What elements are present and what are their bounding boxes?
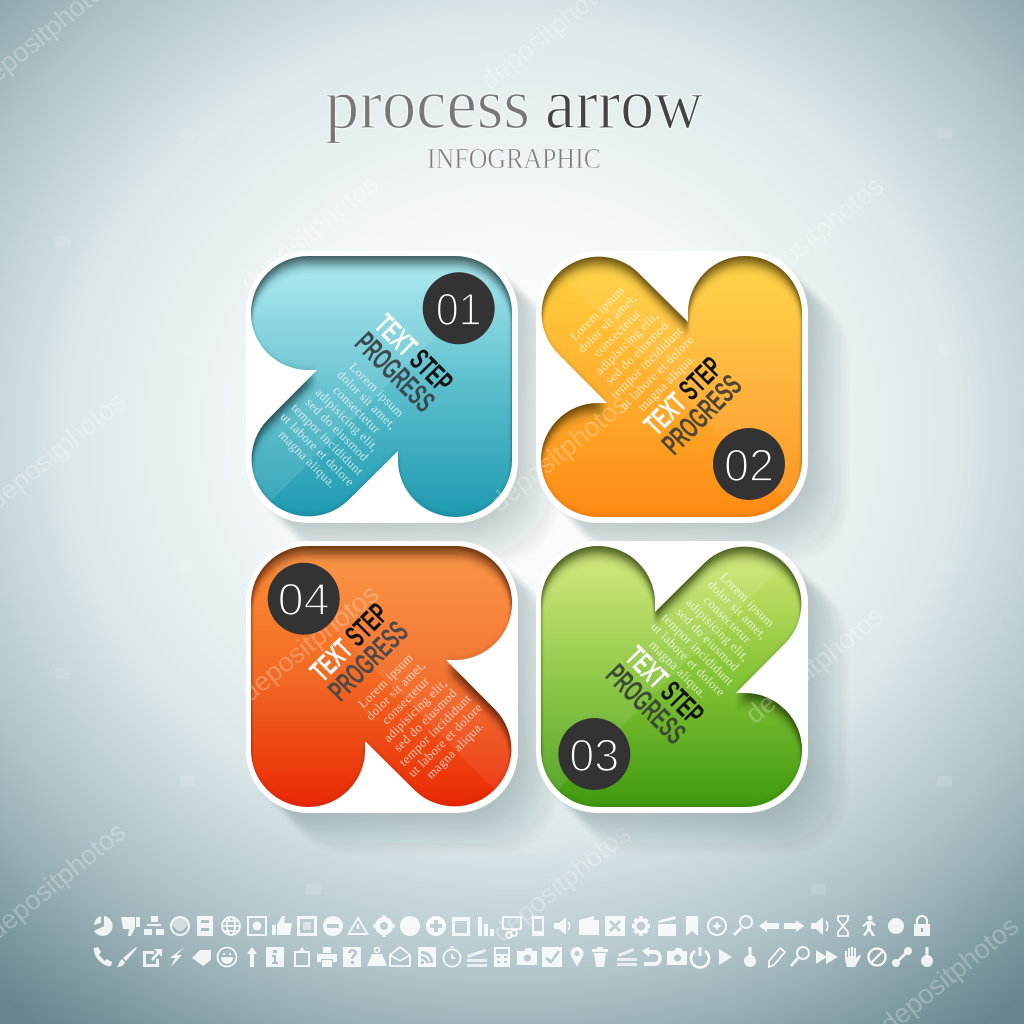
white card 04	[246, 541, 518, 813]
title: arrow	[545, 64, 703, 144]
body text 01: consectetur	[330, 383, 384, 437]
number badge 04: 04	[278, 574, 330, 625]
body text 01: ut labore et dolore	[277, 410, 357, 489]
body text 01	[268, 350, 417, 499]
body text 02	[557, 273, 706, 422]
body text 01: tempor incididunt	[288, 401, 366, 478]
body text 01: Lorem ipsum	[347, 360, 407, 420]
heading 03: PROGRESS	[599, 658, 692, 751]
body text 02: magna aliqua.	[635, 351, 698, 414]
title: process	[325, 64, 530, 144]
white card 03	[536, 541, 808, 813]
arrow 04 pointing up-left	[251, 546, 512, 807]
heading 03	[599, 640, 710, 751]
body text 02: dolor sit amet,	[575, 291, 640, 356]
body text 03: consectetur	[701, 593, 754, 647]
body text 04: tempor incididunt	[396, 691, 474, 769]
white card 02	[536, 251, 808, 523]
body text 01: dolor sit amet,	[334, 367, 399, 432]
panel: step 01 teal arrow	[246, 251, 518, 523]
heading 04	[304, 597, 415, 708]
heading 01	[348, 308, 459, 419]
watermarks over panels: depositphotos	[740, 600, 889, 730]
icon row 1	[94, 915, 930, 938]
body text 04: adipisicing elit,	[381, 676, 450, 745]
body text 03: tempor incididunt	[659, 611, 737, 688]
body text 02: consectetur	[591, 306, 644, 360]
body text 04: consectetur	[379, 674, 432, 727]
body text 03: adipisicing elit,	[683, 595, 752, 664]
number badge 01: 01	[436, 284, 482, 335]
heading 01: PROGRESS	[348, 326, 441, 419]
heading 04: TEXT STEP	[305, 598, 395, 688]
number badge 03	[558, 718, 630, 790]
body text 03: ut labore et dolore	[648, 620, 728, 699]
heading 02: TEXT STEP	[638, 351, 729, 442]
body text 01: sed do eiusmod	[303, 395, 372, 464]
white card 01	[246, 251, 518, 523]
panel: step 02 orange arrow	[536, 251, 808, 523]
body text 03: magna aliqua.	[646, 638, 710, 701]
heading 01: TEXT STEP	[368, 309, 458, 399]
watermarks: depositphotos	[235, 168, 384, 298]
heading 02	[637, 350, 749, 462]
icon row 2	[94, 946, 933, 967]
number badge 01	[423, 272, 495, 344]
body text 04: sed do eiusmod	[391, 686, 460, 755]
arrow 02 pointing down-right	[541, 256, 802, 517]
arrow 03 pointing down-left	[541, 546, 802, 807]
watermarks over panels: depositphotos	[485, 388, 634, 518]
watermark on red: depositphotos	[235, 578, 384, 708]
body text 04: dolor sit amet,	[363, 658, 428, 723]
watermarks: depositphotos	[740, 170, 889, 300]
body text 01: magna aliqua.	[276, 428, 339, 491]
panel: step 03 green arrow	[536, 541, 808, 813]
number badge 02: 02	[724, 440, 774, 491]
heading 04: PROGRESS	[322, 615, 415, 708]
long shadows	[251, 256, 848, 853]
body text 03: Lorem ipsum	[717, 570, 777, 630]
body text 01: adipisicing elit,	[312, 385, 382, 454]
body text 02: ut labore et dolore	[617, 333, 697, 413]
body text 04: magna aliqua.	[423, 718, 487, 782]
body text 04	[346, 641, 495, 790]
watermarks over panels	[485, 388, 889, 730]
body text 03: dolor sit amet,	[705, 577, 770, 642]
number badge 04	[268, 563, 340, 635]
number badge 03: 03	[569, 730, 619, 781]
body text 04: ut labore et dolore	[405, 700, 485, 780]
body text 02: adipisicing elit,	[592, 308, 662, 378]
watermarks: depositphotos	[487, 818, 636, 948]
body text 02: sed do eiusmod	[603, 318, 672, 387]
panel: step 04 red arrow	[246, 541, 518, 813]
number badge 02	[713, 428, 785, 500]
body text 02: tempor incididunt	[608, 324, 686, 402]
title	[325, 64, 703, 144]
arrow 01 pointing up-right	[251, 256, 512, 517]
heading 02: PROGRESS	[656, 369, 749, 462]
body text 03: sed do eiusmod	[673, 605, 742, 674]
subtitle: INFOGRAPHIC	[427, 144, 601, 175]
body text 04: Lorem ipsum	[356, 651, 416, 711]
body text 02: Lorem ipsum	[567, 283, 627, 343]
body text 03	[638, 560, 787, 709]
heading 03: TEXT STEP	[619, 641, 709, 731]
